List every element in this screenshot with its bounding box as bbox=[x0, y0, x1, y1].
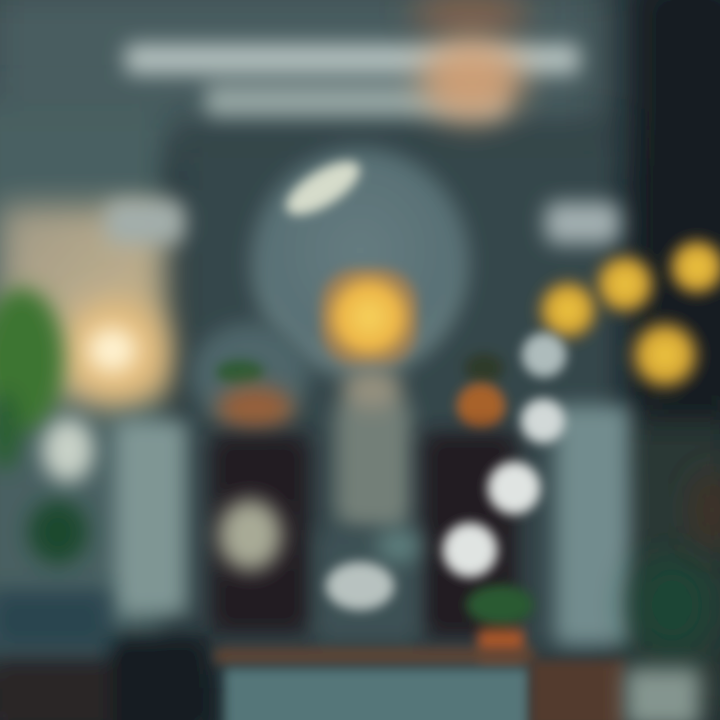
right pot head bbox=[457, 353, 505, 429]
orb b bbox=[521, 399, 565, 443]
lamp glow over title bbox=[410, 0, 530, 122]
bottom potted plant bbox=[466, 585, 534, 662]
left white orb bbox=[42, 418, 94, 482]
bottom teal panel bbox=[224, 668, 530, 720]
orb a bbox=[522, 333, 566, 377]
orb e bbox=[326, 562, 394, 610]
light bulb bbox=[252, 148, 468, 376]
bulb filament glow bbox=[320, 268, 418, 366]
orb d bbox=[443, 523, 497, 577]
bottom right floor bbox=[530, 660, 700, 720]
white orbs bbox=[326, 333, 566, 610]
right plant bbox=[630, 470, 720, 653]
orb 3 bbox=[533, 275, 603, 345]
left column bbox=[115, 420, 187, 615]
right column bbox=[555, 405, 630, 645]
table strip bbox=[215, 648, 535, 664]
left light panel bbox=[0, 200, 185, 404]
orb c bbox=[488, 462, 540, 514]
lower left dark base bbox=[0, 590, 210, 720]
plant: left bbox=[0, 288, 88, 564]
center lower panel bbox=[318, 529, 422, 640]
orb 2 bbox=[590, 249, 660, 319]
right top label bbox=[545, 202, 620, 244]
title bbox=[125, 44, 580, 116]
dark box left bbox=[210, 434, 310, 634]
orb 4 bbox=[625, 315, 705, 395]
left pot arch bbox=[192, 323, 308, 430]
bulb highlight bbox=[278, 151, 368, 225]
central figure bbox=[335, 368, 411, 530]
orb 1 bbox=[664, 234, 720, 300]
dark box right bbox=[422, 432, 518, 638]
yellow orbs bbox=[533, 234, 720, 395]
